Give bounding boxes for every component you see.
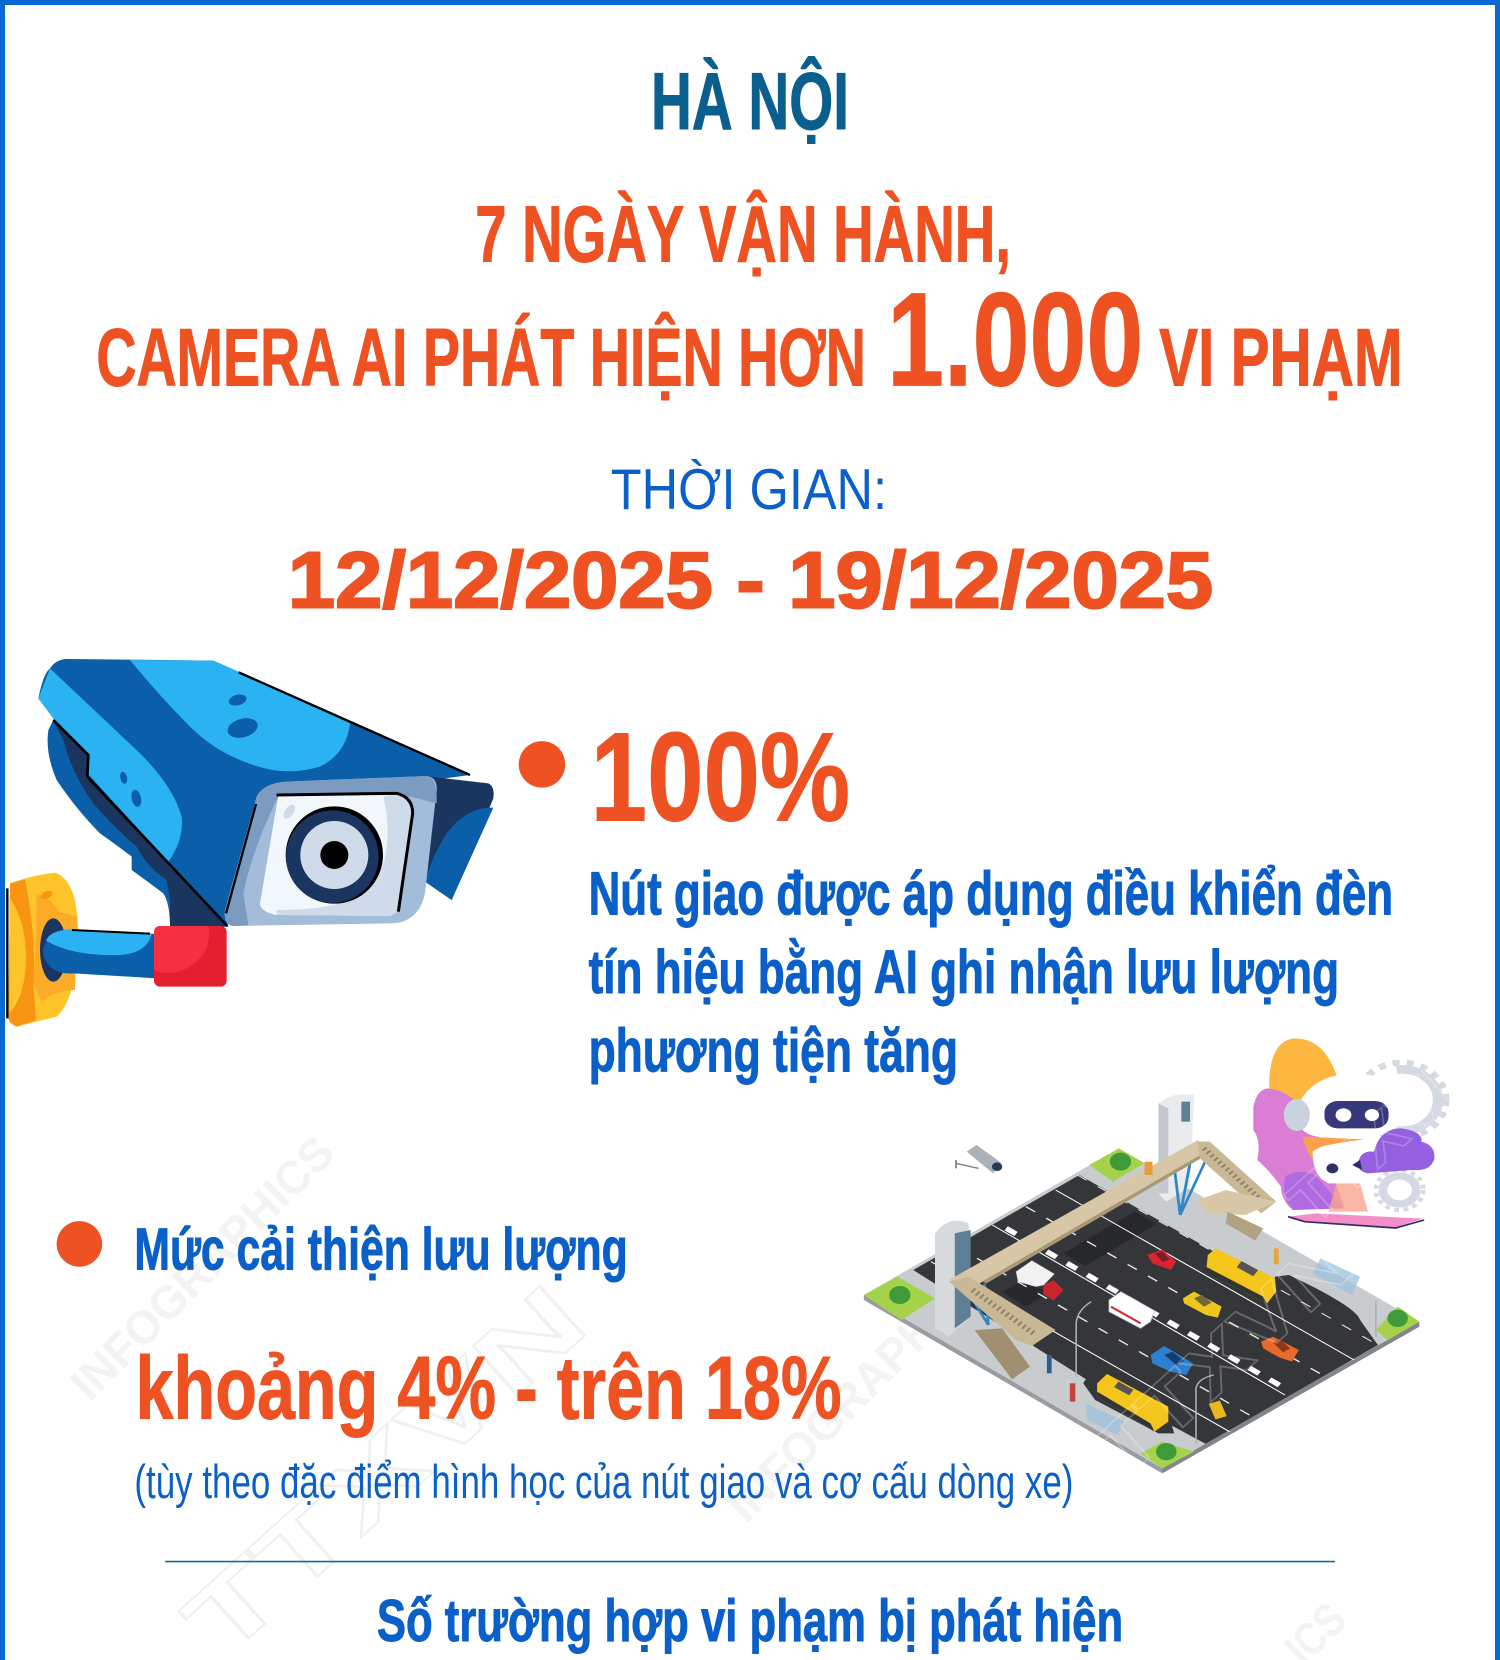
watermark: over illustration: TTXVN: [1275, 1031, 1495, 1238]
time label: THỜI GIAN:: [611, 458, 887, 522]
green corners: [864, 1148, 1419, 1468]
truck: [1016, 1261, 1064, 1301]
statistic: improvement range: khoảng 4% - trên 18%: [135, 1339, 842, 1438]
icon: security camera: [6, 659, 494, 1027]
watermark: INFOGRAPHICS: [717, 1248, 1000, 1532]
heading: location: HÀ NỘI: [651, 57, 849, 147]
heading: traffic improvement: Mức cải thiện lưu lượng: [134, 1215, 628, 1282]
orange car: [1261, 1337, 1299, 1362]
red car: [1147, 1249, 1176, 1270]
statistic: 100%: 100%: [591, 706, 850, 847]
title line 2: CAMERA AI PHÁT HIỆN HƠN: [96, 312, 866, 403]
note: (tùy theo đặc điểm hình học của nút giao và cơ cấu dòng xe): [134, 1456, 1073, 1509]
bullet: [57, 1221, 102, 1267]
road block base: [864, 1148, 1419, 1473]
title line 2: 1.000: [887, 265, 1143, 414]
bullet: [519, 741, 565, 788]
street lamps: [1076, 1300, 1376, 1443]
section heading: Số trường hợp vi phạm bị phát hiện: [377, 1587, 1123, 1654]
date range: 12/12/2025 - 19/12/2025: [288, 536, 1213, 625]
yellow bus top: [1206, 1248, 1276, 1303]
AI robot with gears and cloud: [1253, 1038, 1446, 1228]
title line 1: 7 NGÀY VẬN HÀNH,: [475, 189, 1011, 278]
footbridge towers and supports: [935, 1094, 1206, 1337]
pedestrians: [1047, 1162, 1279, 1420]
watermark: [60, 1126, 1356, 1660]
title line 2: VI PHẠM: [1159, 312, 1403, 403]
blue car: [1151, 1346, 1193, 1375]
ambulance: [1109, 1292, 1154, 1328]
text block: 100% description: [589, 860, 1393, 1085]
watermark: over illustration: TTXVN: [1077, 1220, 1369, 1494]
title line 2: [96, 265, 1403, 414]
small camera: [956, 1145, 1002, 1173]
watermark: INFOGRAPHICS: [60, 1126, 344, 1410]
yellow bus bottom: [1097, 1374, 1168, 1432]
footbridge deck and stairs: [949, 1140, 1276, 1379]
yellow taxi: [1183, 1292, 1222, 1318]
illustration: smart intersection with footbridge: [864, 1038, 1450, 1474]
lane markings: [931, 1175, 1378, 1432]
bus shelters: [1085, 1258, 1360, 1435]
text block: 100% description: phương tiện tăng: [589, 1016, 958, 1085]
